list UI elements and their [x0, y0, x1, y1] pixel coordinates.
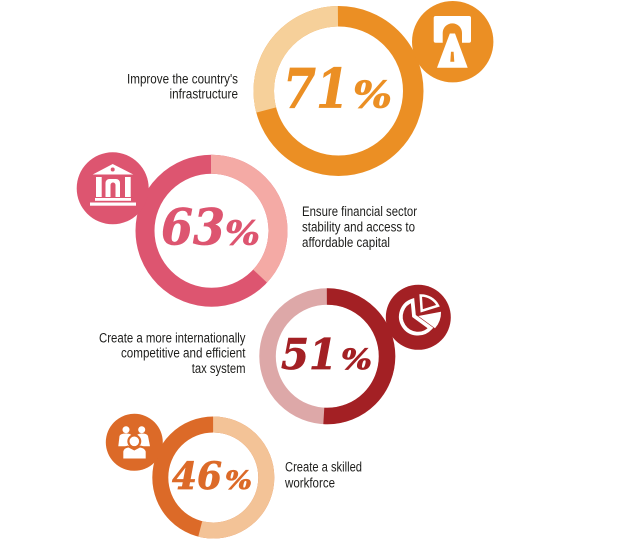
value: 46%: 46 — [172, 454, 222, 498]
label: financial sector: stability and access to — [302, 220, 415, 234]
value: 51% — [281, 330, 372, 379]
panel: financial sector 63% — [77, 152, 417, 297]
value: 63%: % — [225, 214, 260, 252]
label: skilled workforce: workforce — [284, 476, 335, 490]
label: skilled workforce — [284, 460, 362, 490]
label: infrastructure: Improve the country's — [127, 72, 238, 86]
value: 46% — [172, 454, 252, 498]
icon: bank — [77, 152, 149, 224]
label: tax system: tax system — [192, 361, 246, 376]
donut: 71% — [264, 16, 413, 166]
donut: 63% — [145, 164, 278, 297]
value: 71%: % — [353, 74, 392, 116]
icon: tunnel — [412, 1, 493, 82]
value: 46%: % — [225, 466, 252, 495]
label: tax system — [99, 330, 246, 376]
donut: 46% — [160, 424, 266, 530]
label: infrastructure — [127, 72, 238, 102]
value: 63%: 63 — [161, 198, 225, 256]
panel: infrastructure 71% — [127, 1, 493, 166]
panel: skilled workforce 46% — [106, 414, 362, 530]
value: 71%: 71 — [283, 56, 349, 120]
donut: 51% — [268, 297, 387, 416]
label: financial sector — [302, 204, 417, 250]
label: financial sector: Ensure financial sector — [302, 204, 417, 219]
label: tax system: competitive and efficient — [121, 346, 246, 360]
value: 51%: 51 — [281, 330, 337, 379]
icon: people — [106, 414, 163, 471]
panel: tax system 51% — [99, 285, 451, 416]
label: skilled workforce: Create a skilled — [285, 460, 362, 474]
label: infrastructure: infrastructure — [170, 86, 238, 102]
label: financial sector: affordable capital — [302, 235, 390, 250]
label: tax system: Create a more internationally — [99, 330, 246, 346]
value: 71% — [283, 56, 392, 120]
icon: pie chart — [386, 285, 451, 350]
value: 51%: % — [341, 343, 372, 376]
